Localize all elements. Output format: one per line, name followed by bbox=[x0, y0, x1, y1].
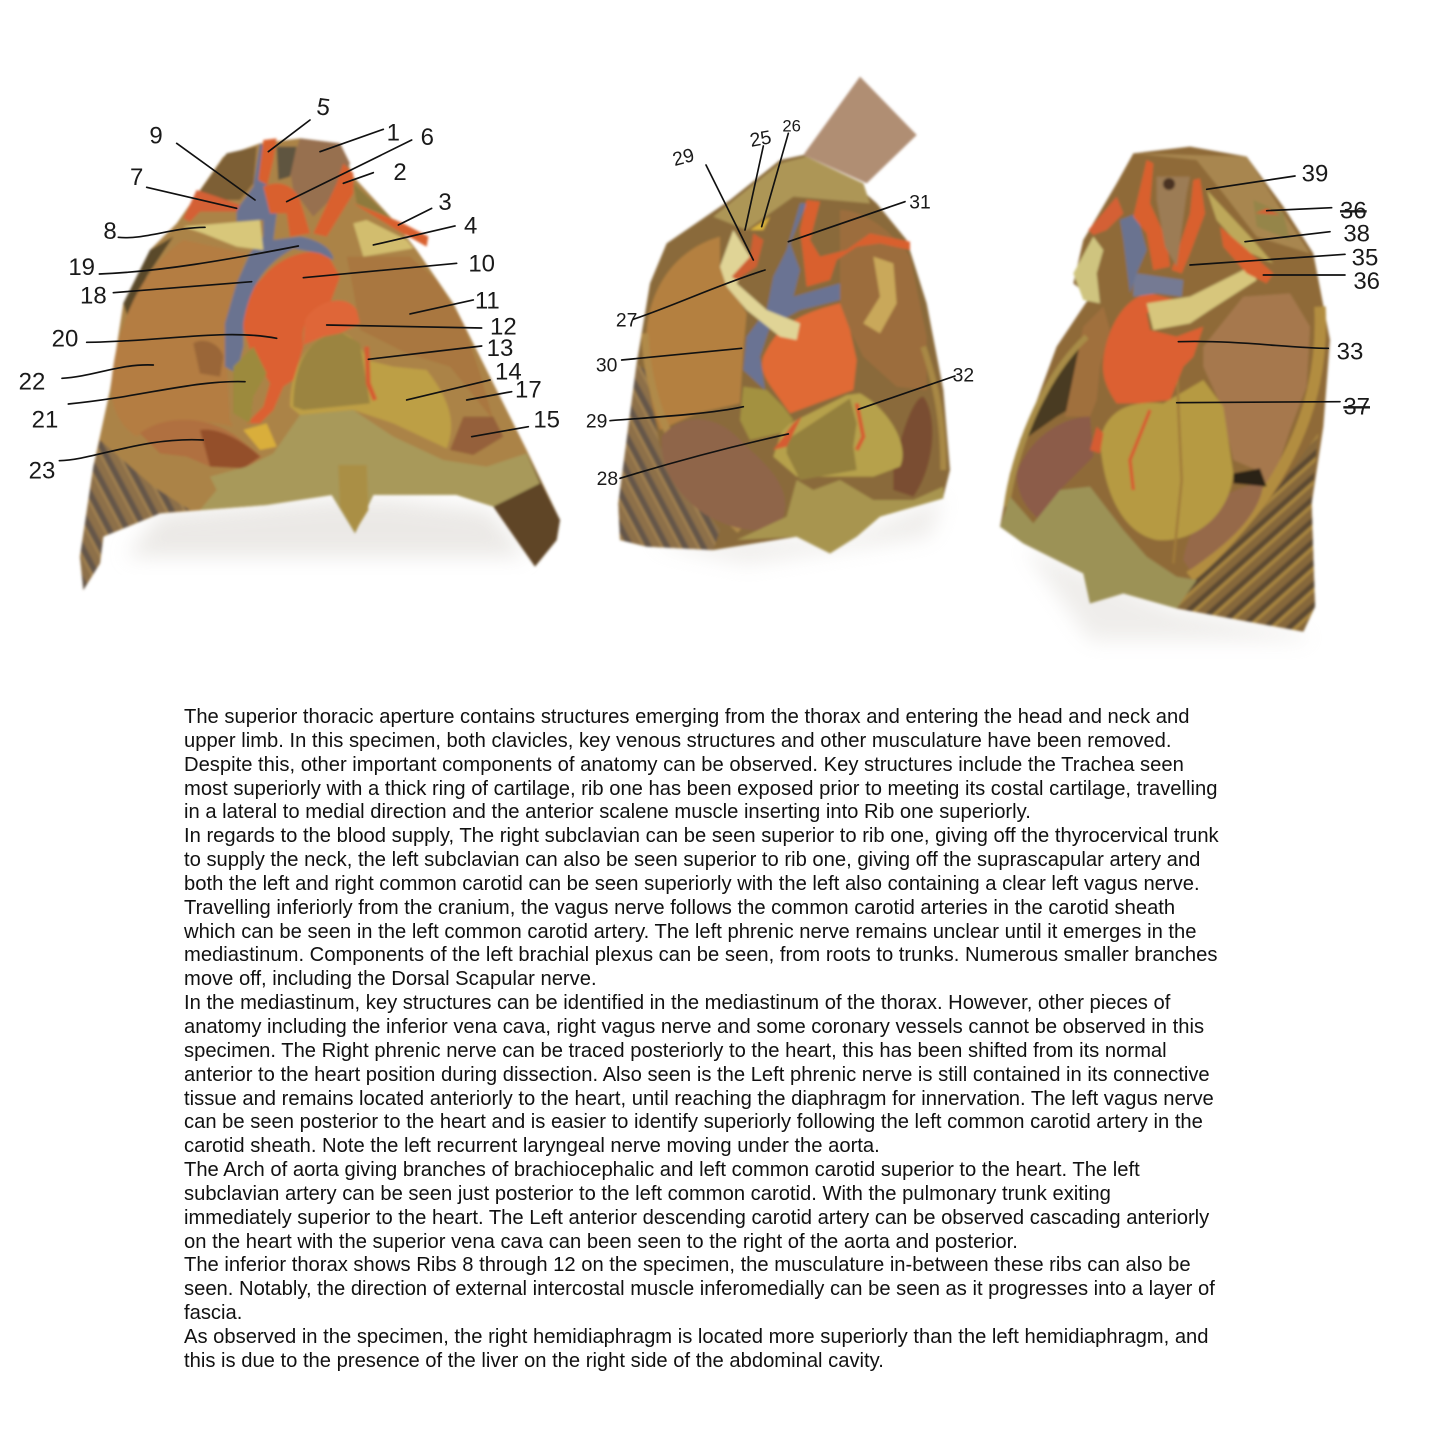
description text bbox=[184, 706, 1219, 1372]
label 39: 39 bbox=[1302, 161, 1328, 188]
left lung bbox=[840, 210, 927, 390]
label 27 bbox=[616, 270, 765, 332]
label 30: 30 bbox=[596, 356, 617, 377]
label 18: 18 bbox=[80, 282, 107, 309]
label 9: 9 bbox=[149, 122, 163, 149]
thoracic wall bbox=[618, 155, 950, 553]
label 8 bbox=[103, 218, 205, 245]
rim bbox=[1190, 307, 1320, 577]
label 29 lower: 29 bbox=[586, 411, 607, 432]
yellow left bbox=[1073, 237, 1103, 303]
left lung bbox=[1065, 307, 1110, 417]
liver dome bbox=[140, 420, 262, 468]
description text: most superiorly with a thick ring of cartilage, rib one has been exposed prior to meeting its costal cartilage, travelling bbox=[184, 778, 1217, 800]
label 21 bbox=[32, 382, 245, 433]
top band bbox=[713, 157, 870, 230]
aorta bbox=[242, 252, 340, 423]
specimen: right oblique view bbox=[1000, 147, 1380, 640]
label 13: 13 bbox=[487, 335, 513, 362]
label 5: 5 bbox=[315, 93, 332, 122]
description text: both the left and right common carotid can be seen superiorly with the left also containing a clear left vagus nerve. bbox=[184, 873, 1200, 895]
label 28: 28 bbox=[597, 469, 618, 490]
fat right bbox=[863, 257, 897, 333]
left ribs bbox=[80, 440, 190, 590]
label 6 bbox=[287, 124, 434, 202]
label 9 bbox=[149, 122, 255, 200]
description text: anterior to the heart position during dissection. Also seen is the Left phrenic nerve is still contained in its connective bbox=[184, 1064, 1210, 1086]
label 23 bbox=[29, 440, 203, 484]
label 10 bbox=[303, 251, 495, 278]
description text: mediastinum. Components of the left brachial plexus can be seen, from roots to trunks. Numerous smaller branches bbox=[184, 944, 1217, 966]
description text: this is due to the presence of the liver on the right side of the abdominal cavity. bbox=[184, 1350, 884, 1372]
description text: in a lateral to medial direction and the anterior scalene muscle inserting into Rib one superiorly. bbox=[184, 801, 1031, 823]
label 35 bbox=[1190, 244, 1378, 271]
label 32: 32 bbox=[953, 366, 974, 387]
description text: fascia. bbox=[184, 1302, 242, 1324]
left lung bbox=[347, 257, 493, 420]
label 33: 33 bbox=[1337, 338, 1363, 365]
label 38: 38 bbox=[1343, 221, 1370, 248]
label 14: 14 bbox=[495, 358, 522, 385]
label 32 bbox=[858, 366, 974, 409]
label 29 lower bbox=[586, 407, 743, 432]
label 25: 25 bbox=[748, 127, 773, 152]
shadow bbox=[1023, 547, 1310, 640]
left dome bbox=[450, 417, 503, 455]
label 20: 20 bbox=[52, 326, 78, 353]
label 15: 15 bbox=[533, 407, 560, 434]
label 4: 4 bbox=[464, 212, 477, 239]
heart bbox=[1100, 380, 1233, 540]
label 12: 12 bbox=[490, 313, 517, 340]
description text: to supply the neck, the left subclavian can also be seen superior to rib one, giving off the suprascapular artery and bbox=[184, 849, 1200, 871]
big dome bbox=[662, 419, 785, 530]
vena cava bbox=[743, 203, 840, 390]
label 29 top bbox=[670, 145, 753, 260]
aorta bbox=[1103, 293, 1203, 403]
small dome bbox=[893, 397, 932, 497]
vein bbox=[1133, 273, 1183, 297]
label 14 bbox=[407, 358, 522, 400]
description text: upper limb. In this specimen, both clavicles, key venous structures and other musculature have been removed. bbox=[184, 730, 1171, 752]
anatomy figures bbox=[19, 76, 1380, 642]
heart bbox=[290, 332, 451, 448]
label 39 bbox=[1207, 161, 1328, 189]
label 17 bbox=[467, 376, 542, 403]
label 2: 2 bbox=[393, 159, 407, 186]
coronary bbox=[367, 347, 375, 400]
label 31 bbox=[788, 192, 931, 242]
label 13 bbox=[368, 335, 513, 362]
label 10: 10 bbox=[468, 251, 495, 278]
label 35: 35 bbox=[1352, 244, 1378, 271]
label 6: 6 bbox=[421, 124, 434, 151]
description text: The superior thoracic aperture contains structures emerging from the thorax and entering the head and neck and bbox=[184, 706, 1189, 728]
yellow band bbox=[720, 230, 800, 340]
xiphoid bbox=[338, 465, 368, 532]
label 36 lower bbox=[1263, 268, 1380, 295]
label 20 bbox=[52, 326, 277, 353]
label 19: 19 bbox=[68, 254, 95, 281]
description text: Travelling inferiorly from the cranium, the vagus nerve follows the common carotid arteries in the carotid sheath bbox=[184, 897, 1175, 919]
shadow bbox=[127, 498, 527, 557]
specimen: left oblique view bbox=[586, 77, 974, 563]
label 31: 31 bbox=[909, 192, 931, 213]
rib stripes bbox=[1177, 433, 1318, 632]
label 30 bbox=[596, 348, 742, 377]
bottom band bbox=[737, 480, 943, 553]
nerve region bbox=[1207, 190, 1273, 263]
rim bbox=[645, 333, 740, 530]
arteries bbox=[263, 183, 310, 237]
label 1 bbox=[320, 120, 400, 152]
left dome bbox=[1017, 417, 1093, 520]
description text: carotid sheath. Note the left recurrent laryngeal nerve moving under the aorta. bbox=[184, 1135, 880, 1157]
right lung bbox=[111, 240, 247, 437]
label 22 bbox=[19, 365, 153, 395]
label 18 bbox=[80, 282, 252, 309]
label 25 bbox=[745, 127, 773, 230]
right dome bbox=[1183, 483, 1263, 570]
label 7 bbox=[130, 164, 237, 208]
bottom band bbox=[1000, 487, 1197, 608]
rib band bbox=[200, 410, 540, 533]
description text: subclavian artery can be seen just posterior to the left common carotid. With the pulmonary trunk exiting bbox=[184, 1183, 1111, 1205]
label 3 bbox=[398, 189, 452, 225]
pulmonary trunk bbox=[303, 301, 360, 345]
label 26: 26 bbox=[782, 117, 801, 136]
description text: immediately superior to the heart. The Left anterior descending carotid artery can be observed cascading anteriorly bbox=[184, 1207, 1209, 1229]
label 26 bbox=[762, 117, 801, 227]
hand bbox=[803, 77, 917, 183]
label 8: 8 bbox=[103, 218, 117, 245]
label 37: 37 bbox=[1343, 393, 1370, 420]
label 36 lower: 36 bbox=[1353, 268, 1380, 295]
description text: anatomy including the inferior vena cava, right vagus nerve and some coronary vessels cannot be observed in this bbox=[184, 1016, 1204, 1038]
label 36 upper: 36 bbox=[1340, 197, 1367, 224]
upper brown mass bbox=[290, 138, 350, 217]
label 7: 7 bbox=[130, 164, 143, 191]
pericardial fat bbox=[740, 387, 793, 440]
label 36 upper bbox=[1267, 197, 1367, 224]
right ribs bbox=[493, 453, 560, 567]
left cavity bbox=[1020, 340, 1080, 440]
label 17: 17 bbox=[515, 376, 542, 403]
description text: As observed in the specimen, the right hemidiaphragm is located more superiorly than the left hemidiaphragm, and bbox=[184, 1326, 1209, 1348]
trachea bbox=[1157, 177, 1190, 267]
arteries bbox=[1133, 160, 1170, 270]
thoracic wall bbox=[1000, 147, 1330, 632]
main lung bbox=[1203, 293, 1310, 490]
ribs bbox=[618, 363, 720, 550]
heart bbox=[773, 393, 903, 477]
shadow bbox=[647, 497, 943, 563]
label 4 bbox=[373, 212, 477, 245]
label 1: 1 bbox=[387, 120, 400, 147]
label 27: 27 bbox=[616, 311, 637, 332]
description text: which can be seen in the left common carotid artery. The left phrenic nerve remains unclear until it emerges in the bbox=[184, 921, 1196, 943]
label 22: 22 bbox=[19, 368, 45, 395]
label 19 bbox=[68, 246, 298, 281]
label 2 bbox=[343, 159, 407, 186]
left edge dark bbox=[123, 237, 173, 323]
label 29 top: 29 bbox=[670, 145, 697, 171]
label 28 bbox=[597, 434, 788, 490]
description text: move off, including the Dorsal Scapular nerve. bbox=[184, 968, 597, 990]
right lung bbox=[646, 237, 747, 430]
yellow band bbox=[1147, 267, 1257, 330]
arteries bbox=[800, 200, 910, 287]
description text: seen. Notably, the direction of external intercostal muscle inferomedially can be seen as it progresses into a layer of bbox=[184, 1278, 1215, 1300]
label 38 bbox=[1245, 221, 1370, 248]
top area bbox=[1133, 153, 1310, 253]
label 3: 3 bbox=[438, 189, 452, 216]
description text: The Arch of aorta giving branches of brachiocephalic and left common carotid superior to the heart. The left bbox=[184, 1159, 1140, 1181]
label 23: 23 bbox=[29, 457, 55, 484]
fat bbox=[183, 220, 263, 250]
description text: on the heart with the superior vena cava can been seen to the right of the aorta and posterior. bbox=[184, 1231, 1018, 1253]
description text: can be seen posterior to the heart and is easier to identify superiorly following the left common carotid artery in the bbox=[184, 1111, 1203, 1133]
label 15 bbox=[472, 407, 560, 437]
description text: In regards to the blood supply, The right subclavian can be seen superior to rib one, giving off the thyrocervical trunk bbox=[184, 825, 1219, 847]
thoracic wall bbox=[80, 138, 560, 590]
specimen: anterior view bbox=[19, 93, 560, 590]
description text: In the mediastinum, key structures can be identified in the mediastinum of the thorax. However, other pieces of bbox=[184, 992, 1170, 1014]
description text: specimen. The Right phrenic nerve can be traced posteriorly to the heart, this has been shifted from its normal bbox=[184, 1040, 1167, 1062]
description text: The inferior thorax shows Ribs 8 through 12 on the specimen, the musculature in-between these ribs can also be bbox=[184, 1254, 1191, 1276]
vena cava bbox=[225, 143, 333, 373]
label 33 bbox=[1178, 338, 1363, 365]
label 21: 21 bbox=[32, 406, 58, 433]
label 11 bbox=[410, 287, 500, 314]
label 11: 11 bbox=[475, 287, 500, 314]
label 5 bbox=[268, 93, 332, 152]
description text: Despite this, other important components of anatomy can be observed. Key structures include the Trachea seen bbox=[184, 754, 1184, 776]
description text: tissue and remains located anteriorly to the heart, until reaching the diaphragm for innervation. The left vagus nerve bbox=[184, 1088, 1214, 1110]
aorta bbox=[762, 303, 857, 413]
